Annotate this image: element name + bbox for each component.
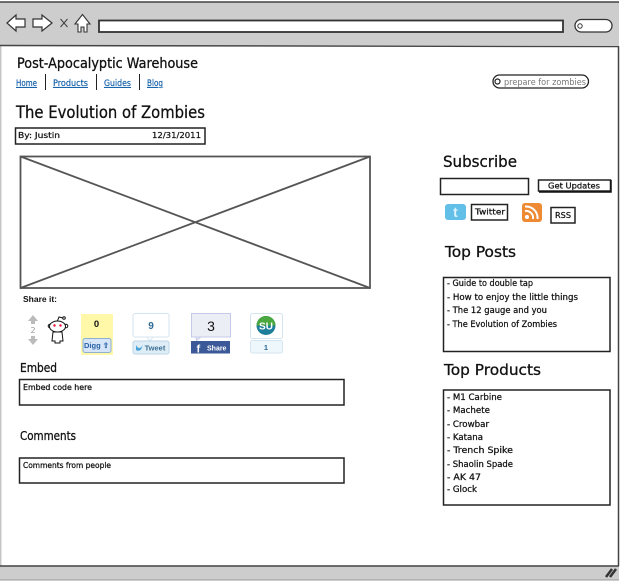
top products list: - AK 47	[447, 473, 481, 483]
article image placeholder	[20, 156, 370, 288]
navigation links	[16, 74, 163, 90]
top posts list: - Guide to double tap	[447, 279, 533, 289]
top products list: - Crowbar	[447, 420, 490, 430]
tweet widget	[133, 314, 169, 354]
top products list: - M1 Carbine	[447, 393, 502, 403]
digg widget	[81, 314, 113, 355]
top posts heading: Top Posts	[444, 243, 516, 261]
site name heading: Post-Apocalyptic Warehouse	[17, 56, 198, 72]
top products list: - Glock	[447, 485, 477, 495]
browser toolbar	[0, 2, 619, 46]
icon: reddit alien	[48, 317, 68, 343]
get updates button: Get Updates	[548, 182, 600, 190]
site search box: prepare for zombies	[504, 78, 587, 88]
tweet widget: 9	[148, 321, 154, 332]
get updates button	[538, 180, 611, 192]
article title: The Evolution of Zombies	[15, 103, 205, 123]
navigation links: Products	[53, 79, 88, 89]
reddit widget	[28, 315, 68, 345]
comments heading: Comments	[20, 429, 76, 443]
facebook share widget: Share	[207, 346, 227, 352]
icon: twitter: t	[453, 204, 458, 220]
browser search field	[575, 20, 612, 32]
digg widget: Digg ⇧	[84, 341, 109, 350]
top posts list	[444, 278, 610, 352]
rss label	[551, 208, 575, 223]
icon: forward arrow	[33, 15, 52, 31]
icon: home	[75, 14, 90, 32]
icon: resize grip	[606, 569, 616, 577]
navigation links: Home	[16, 79, 37, 89]
comments box	[20, 458, 344, 483]
icon: stop	[60, 19, 68, 27]
embed code box: Embed code here	[23, 383, 92, 392]
facebook share widget: 3	[207, 318, 215, 334]
stumbleupon widget: 1	[264, 343, 268, 352]
navigation links: Guides	[104, 79, 131, 89]
byline box: 12/31/2011	[152, 131, 201, 140]
stumbleupon widget: SU	[259, 322, 273, 332]
twitter label: Twitter	[474, 208, 506, 216]
icon: vote arrows: 2	[30, 326, 36, 335]
comments box: Comments from people	[23, 461, 111, 470]
rss label: RSS	[555, 211, 571, 220]
top products list: - Shaolin Spade	[447, 460, 513, 470]
subscribe heading: Subscribe	[443, 152, 517, 171]
share label: Share it:	[23, 294, 57, 304]
byline box: By: Justin	[18, 131, 60, 140]
address bar	[99, 20, 563, 32]
stumbleupon widget	[250, 314, 282, 353]
facebook share widget	[191, 314, 230, 356]
top products list: - Machete	[447, 406, 490, 416]
tweet widget: Tweet	[145, 344, 166, 352]
icon: twitter	[445, 204, 466, 220]
navigation links: Blog	[147, 79, 163, 89]
top posts list: - The 12 gauge and you	[447, 306, 547, 316]
browser status bar	[0, 566, 619, 580]
embed code box	[20, 380, 344, 405]
top posts list: - How to enjoy the little things	[447, 293, 579, 303]
top products list: - Trench Spike	[447, 446, 513, 456]
twitter label	[472, 204, 508, 220]
icon: back arrow	[7, 15, 25, 31]
top products list: - Katana	[447, 433, 483, 443]
top products heading: Top Products	[443, 361, 541, 379]
top products list	[444, 390, 610, 505]
icon: rss	[522, 203, 542, 222]
facebook share widget: f	[196, 344, 200, 356]
subscribe email input	[440, 178, 528, 194]
byline box	[16, 128, 205, 144]
digg widget: 0	[94, 319, 99, 330]
embed heading: Embed	[20, 361, 57, 375]
top posts list: - The Evolution of Zombies	[447, 320, 558, 330]
site search box	[493, 75, 588, 88]
